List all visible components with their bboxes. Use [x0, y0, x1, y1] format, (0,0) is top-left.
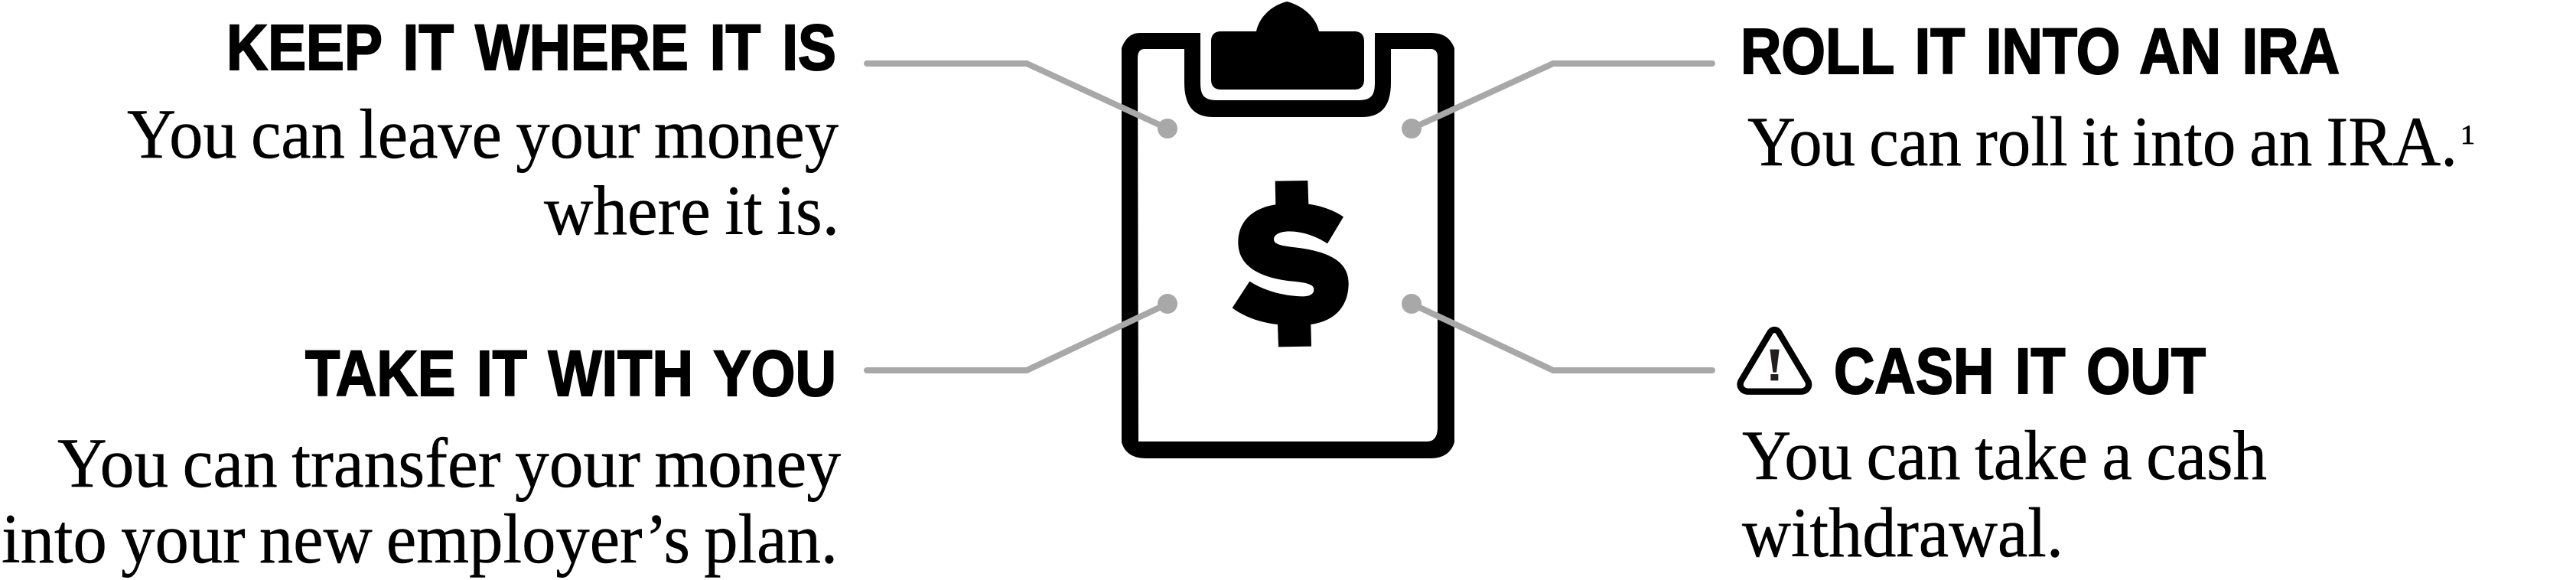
panel: cash it out [1741, 330, 2267, 572]
connector: cash it out [1402, 294, 1712, 370]
heading: roll it into an IRA: ROLL IT INTO AN IRA [1741, 15, 2340, 87]
text block: cash description: You can take a cash [1742, 416, 2267, 494]
connector: keep it where it is [867, 64, 1177, 138]
heading: keep it where it is: KEEP IT WHERE IT IS [226, 11, 836, 83]
text block: keep description: where it is. [544, 171, 839, 249]
text block: take description: You can transfer your money [57, 424, 841, 502]
dollar sign [1233, 181, 1349, 347]
heading: take it with you: TAKE IT WITH YOU [305, 337, 836, 409]
icon: clipboard with dollar sign [1122, 2, 1454, 458]
text block: take description [2, 424, 841, 578]
text block: cash description: withdrawal. [1742, 494, 2063, 572]
text block: keep description [127, 95, 839, 249]
clipboard clip [1211, 2, 1364, 90]
text block: cash description [1742, 416, 2267, 572]
icon: warning triangle [1741, 330, 1809, 392]
panel: keep it where it is [127, 11, 839, 249]
text block: take description: into your new employer’s plan. [2, 500, 838, 578]
panel: roll it into an IRA [1741, 15, 2475, 181]
connector: take it with you [867, 294, 1177, 370]
text block: keep description: You can leave your money [127, 95, 839, 173]
clipboard board outline [1122, 33, 1454, 458]
heading: cash it out: CASH IT OUT [1834, 335, 2206, 407]
text block: roll description: 1 [2460, 119, 2475, 150]
text block: roll description: You can roll it into an IRA. [1747, 103, 2457, 181]
connector: roll it into an IRA [1402, 64, 1712, 138]
panel: take it with you [2, 337, 841, 578]
